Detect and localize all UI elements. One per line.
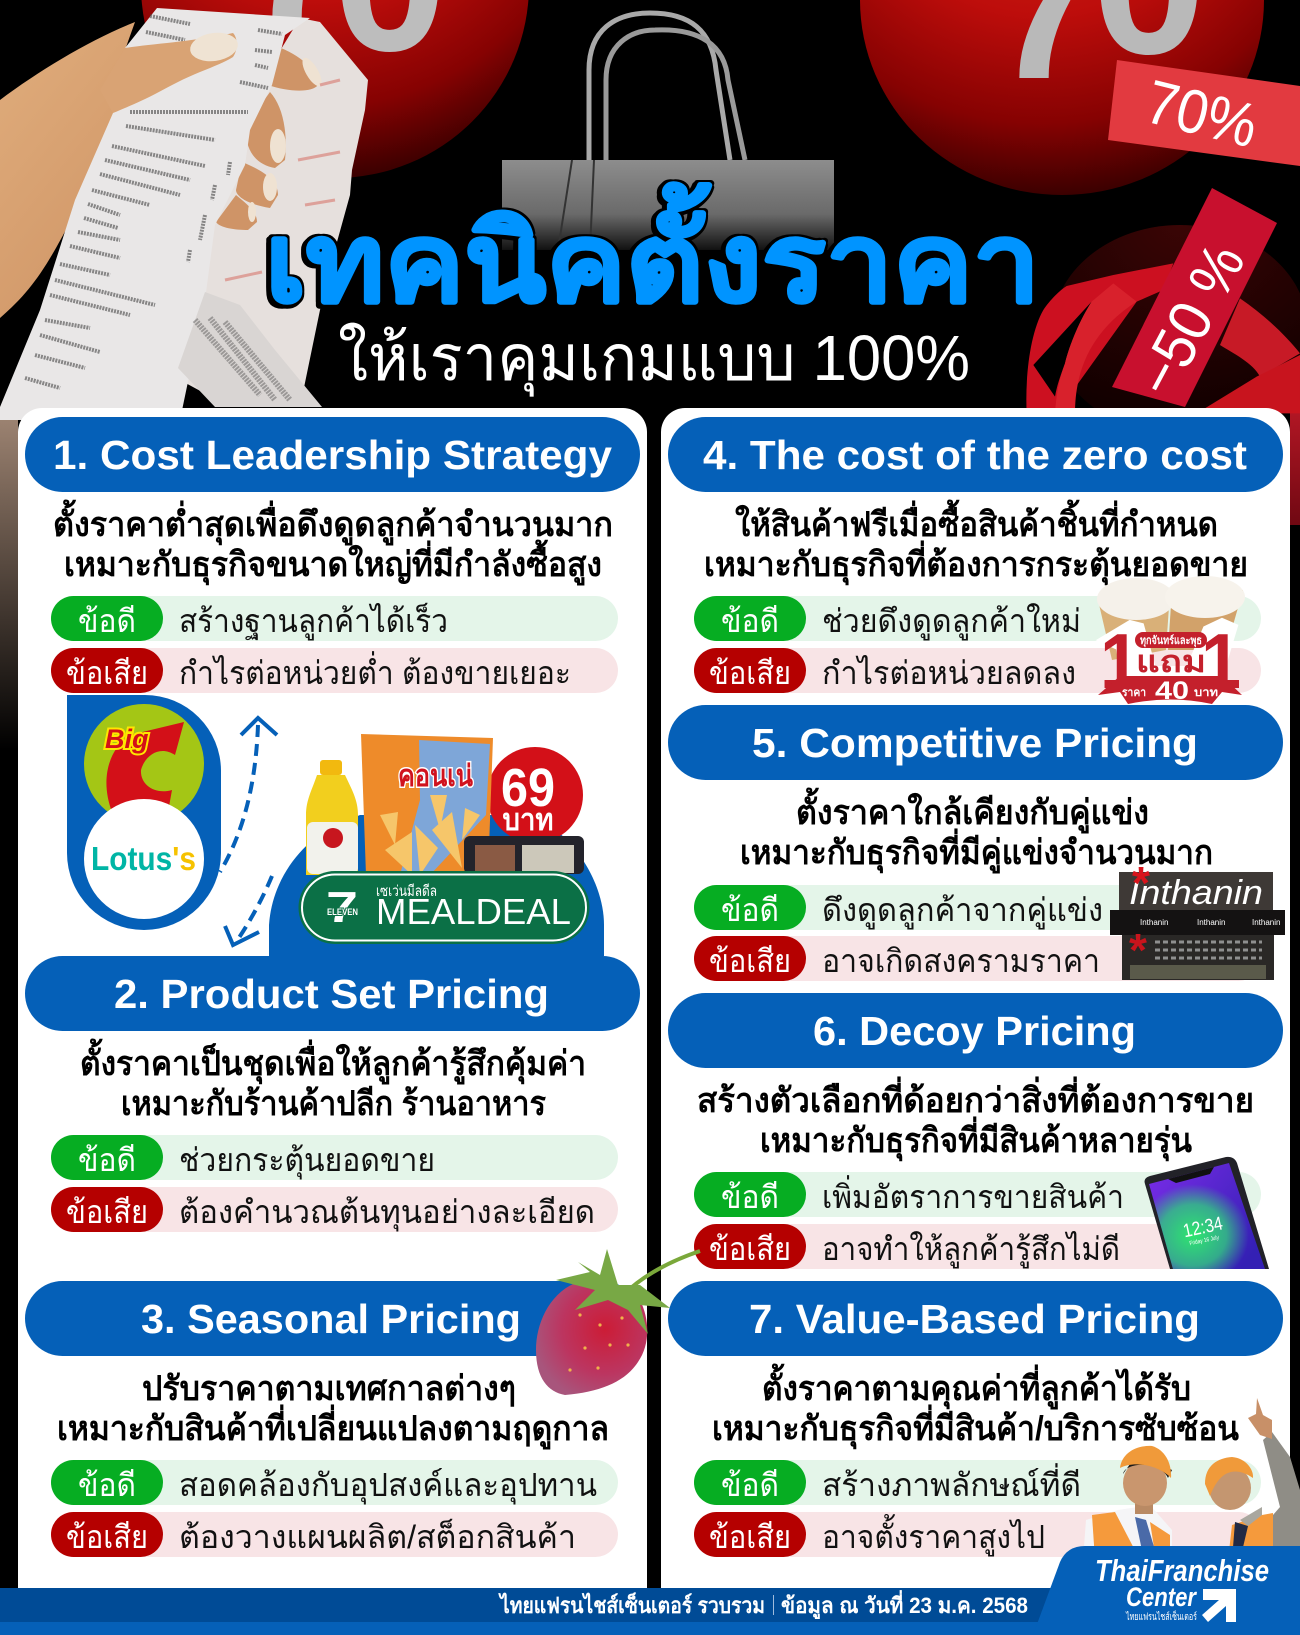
- heading 3: 3. Seasonal Pricing: [141, 1296, 521, 1342]
- panel: right white card: [661, 408, 1290, 1590]
- pro row 7: ข้อดี: [721, 1467, 779, 1503]
- con row 2: ข้อเสีย: [66, 1194, 148, 1230]
- pro row 3: สอดคล้องกับอุปสงค์และอุปทาน: [179, 1467, 597, 1505]
- pro row 2: ช่วยกระตุ้นยอดขาย: [179, 1142, 435, 1180]
- pro row 5: ข้อดี: [721, 892, 779, 928]
- description 1: [53, 499, 613, 586]
- pro row 4: ข้อดี: [721, 603, 779, 639]
- receipt lower strip: [178, 292, 322, 407]
- con row 3: ข้อเสีย: [66, 1519, 148, 1555]
- illustration: Inthanin storefront: Inthanin: [1197, 918, 1225, 927]
- description 7: ตั้งราคาตามคุณค่าที่ลูกค้าได้รับ: [762, 1363, 1191, 1410]
- logo: ThaiFranchise Center: ไทยแฟรนไชส์เซ็นเตอร์: [1125, 1609, 1197, 1623]
- section 4: [668, 417, 1283, 693]
- con row 5: ข้อเสีย: [709, 943, 791, 979]
- section 5: [668, 705, 1283, 981]
- pro row 1: สร้างฐานลูกค้าได้เร็ว: [179, 602, 448, 641]
- description 7: [712, 1363, 1239, 1450]
- con row 1: [51, 648, 618, 693]
- con row 4: กำไรต่อหน่วยลดลง: [822, 655, 1076, 691]
- pro row 4: ช่วยดึงดูดลูกค้าใหม่: [822, 603, 1081, 641]
- illustration: strawberry: [536, 1249, 700, 1395]
- description 5: เหมาะกับธุรกิจที่มีคู่แข่งจำนวนมาก: [740, 828, 1213, 874]
- con row 1: ข้อเสีย: [66, 655, 148, 691]
- section 6: [668, 993, 1283, 1269]
- section 1: [25, 417, 640, 693]
- balloon dark: [1062, 225, 1300, 408]
- footer credit: ไทยแฟรนไชส์เซ็นเตอร์ รวบรวม: [498, 1591, 765, 1618]
- description 4: ให้สินค้าฟรีเมื่อซื้อสินค้าชิ้นที่กำหนด: [735, 499, 1218, 544]
- description 4: [704, 499, 1248, 586]
- description 1: ตั้งราคาต่ำสุดเพื่อดึงดูดลูกค้าจำนวนมาก: [53, 499, 613, 546]
- illustration: Inthanin storefront: Inthanin: [1129, 874, 1263, 912]
- description 1: เหมาะกับธุรกิจขนาดใหญ่ที่มีกำลังซื้อสูง: [64, 539, 602, 586]
- footer date: ข้อมูล ณ วันที่ 23 ม.ค. 2568: [781, 1589, 1028, 1620]
- logo: Lotus's: Lotus's: [91, 840, 196, 877]
- description 2: ตั้งราคาเป็นชุดเพื่อให้ลูกค้ารู้สึกคุ้มค่า: [80, 1038, 586, 1085]
- title: เทคนิคตั้งราคา: [265, 182, 1040, 325]
- berry seeds: [568, 1313, 630, 1372]
- pro row 7: [694, 1460, 1261, 1505]
- con row 2: ต้องคำนวณต้นทุนอย่างละเอียด: [179, 1194, 595, 1232]
- description 3: [57, 1370, 609, 1450]
- ribbon: [1026, 263, 1300, 413]
- description 6: เหมาะกับธุรกิจที่มีสินค้าหลายรุ่น: [760, 1116, 1192, 1162]
- con row 7: [694, 1512, 1261, 1557]
- heading 3: [25, 1281, 640, 1356]
- promo badge: [1098, 617, 1242, 705]
- con row 4: [694, 648, 1261, 693]
- berry body: [536, 1281, 647, 1395]
- description 4: เหมาะกับธุรกิจที่ต้องการกระตุ้นยอดขาย: [704, 540, 1248, 586]
- pro row 2: [51, 1135, 618, 1180]
- illustration: smartphone: Friday 16 July: [1189, 1235, 1220, 1247]
- logo backing: [67, 695, 221, 930]
- promo badge: 1: [1100, 617, 1140, 705]
- description 7: เหมาะกับธุรกิจที่มีสินค้า/บริการซับซ้อน: [712, 1404, 1239, 1450]
- price tag 70%: 70%: [1139, 67, 1264, 161]
- price circle: บาท: [502, 804, 554, 837]
- con row 5: [694, 936, 1261, 981]
- heading 4: [668, 417, 1283, 492]
- illustration: coffee buy one get one: [1097, 576, 1245, 705]
- thumb: [100, 33, 237, 113]
- thumb nail: [190, 32, 238, 62]
- heading 6: [668, 993, 1283, 1068]
- section 7: [668, 1281, 1283, 1557]
- description 3: เหมาะกับสินค้าที่เปลี่ยนแปลงตามฤดูกาล: [57, 1404, 609, 1450]
- illustration: 7-Eleven meal deal: [269, 734, 604, 956]
- logo: ThaiFranchise Center: ThaiFranchise: [1095, 1553, 1269, 1588]
- promo badge: ทุกจันทร์และพุธ: [1140, 634, 1202, 648]
- pro row 6: ข้อดี: [721, 1179, 779, 1215]
- con row 3: [51, 1512, 618, 1557]
- illustration: Inthanin storefront: *: [1129, 924, 1147, 976]
- logo: ThaiFranchise Center: Center: [1126, 1582, 1197, 1612]
- heading 1: [25, 417, 640, 492]
- promo badge: ราคา: [1122, 687, 1146, 699]
- heading 7: [668, 1281, 1283, 1356]
- pro row 7: สร้างภาพลักษณ์ที่ดี: [822, 1463, 1081, 1503]
- description 6: สร้างตัวเลือกที่ด้อยกว่าสิ่งที่ต้องการขาย: [697, 1076, 1254, 1120]
- receipt print red: [225, 80, 340, 280]
- price tag -50%: −50 %: [1123, 233, 1258, 407]
- engineer left: [1083, 1446, 1172, 1560]
- hero photo: balloons, bag, tags: [141, 0, 1300, 435]
- left gutter glow: [0, 410, 18, 750]
- engineer right: [1205, 1398, 1300, 1560]
- meal deal badge: เซเว่นมีลดีล: [376, 883, 437, 900]
- illustration: Inthanin storefront: Inthanin: [1140, 918, 1168, 927]
- description 3: ปรับราคาตามเทศกาลต่างๆ: [142, 1370, 516, 1408]
- icon: arrow: [1202, 1589, 1236, 1622]
- price circle: 69: [501, 758, 555, 818]
- illustration: Inthanin storefront: Inthanin: [1252, 918, 1280, 927]
- balloon left: [141, 0, 529, 178]
- logo: Big C: [84, 704, 204, 824]
- pro row 3: ข้อดี: [78, 1467, 136, 1503]
- food tray: [464, 836, 584, 874]
- heading 2: [25, 956, 640, 1031]
- heading 5: 5. Competitive Pricing: [752, 720, 1198, 766]
- coffee cups: [1097, 576, 1245, 660]
- price tag 70%: [1108, 60, 1300, 166]
- snack bag: [361, 734, 493, 875]
- pro row 6: [694, 1172, 1261, 1217]
- con row 6: [694, 1224, 1261, 1269]
- illustration: smartphone: [1145, 1157, 1269, 1269]
- description 6: [697, 1076, 1254, 1162]
- promo badge: 40: [1155, 677, 1189, 705]
- con row 5: อาจเกิดสงครามราคา: [822, 943, 1100, 979]
- right gutter ribbon: [1290, 400, 1300, 525]
- con row 4: ข้อเสีย: [709, 655, 791, 691]
- stem: [622, 1251, 700, 1296]
- meal deal badge: ELEVEN: [327, 907, 358, 917]
- receipt front strip: [0, 8, 310, 420]
- illustration: Inthanin storefront: [1110, 857, 1285, 980]
- heading 6: 6. Decoy Pricing: [813, 1008, 1136, 1054]
- meal deal badge: [298, 871, 590, 944]
- receipt print: [25, 16, 290, 400]
- subtitle: ให้เราคุมเกมแบบ 100%: [338, 322, 970, 397]
- con row 3: ต้องวางแผนผลิต/สต็อกสินค้า: [179, 1518, 576, 1555]
- panel: left white card: [18, 408, 647, 1590]
- logo: Big C: Big: [105, 724, 149, 754]
- palm: [0, 22, 135, 318]
- con row 1: กำไรต่อหน่วยต่ำ ต้องขายเยอะ: [179, 651, 571, 691]
- pro row 4: [694, 596, 1261, 641]
- drink bottle: [306, 760, 358, 875]
- description 2: [80, 1038, 586, 1123]
- pro row 1: ข้อดี: [78, 603, 136, 639]
- pro row 3: [51, 1460, 618, 1505]
- description 5: [740, 787, 1213, 874]
- meal deal badge: 7: [326, 883, 358, 932]
- hand holding receipt: [0, 8, 368, 420]
- balloon right: [860, 0, 1264, 195]
- heading 1: 1. Cost Leadership Strategy: [53, 432, 612, 478]
- meal deal backing: [269, 815, 604, 956]
- description 5: ตั้งราคาใกล้เคียงกับคู่แข่ง: [796, 787, 1149, 834]
- promo badge: 1: [1201, 617, 1241, 705]
- pro row 1: [51, 596, 618, 641]
- con row 2: [51, 1187, 618, 1232]
- pro row 2: ข้อดี: [78, 1142, 136, 1178]
- con row 6: อาจทำให้ลูกค้ารู้สึกไม่ดี: [822, 1231, 1120, 1269]
- footer bar: [0, 1588, 1300, 1635]
- fingers: [216, 46, 318, 230]
- section 3: [25, 1281, 640, 1557]
- section 2: [25, 956, 640, 1232]
- heading 4: 4. The cost of the zero cost: [703, 432, 1247, 478]
- pro row 5: [694, 885, 1261, 930]
- con row 7: อาจตั้งราคาสูงไป: [822, 1514, 1045, 1557]
- promo badge: บาท: [1194, 687, 1218, 699]
- illustration: Inthanin storefront: *: [1132, 857, 1150, 909]
- finger nails: [248, 55, 325, 222]
- heading 7: 7. Value-Based Pricing: [749, 1296, 1200, 1342]
- promo badge: แถม: [1136, 646, 1206, 679]
- description 2: เหมาะกับร้านค้าปลีก ร้านอาหาร: [121, 1085, 547, 1123]
- logo: Lotus's: [84, 799, 204, 919]
- illustration: smartphone: 12:34: [1181, 1213, 1225, 1242]
- pro row 6: เพิ่มอัตราการขายสินค้า: [822, 1175, 1124, 1215]
- con row 6: ข้อเสีย: [709, 1231, 791, 1267]
- pro row 5: ดึงดูดลูกค้าจากคู่แข่ง: [822, 892, 1103, 930]
- con row 7: ข้อเสีย: [709, 1519, 791, 1555]
- price circle: [487, 747, 583, 843]
- shopping bag: [502, 13, 834, 250]
- heading 2: 2. Product Set Pricing: [114, 971, 549, 1017]
- receipt back strip: [180, 18, 368, 407]
- arrow: up and down dashed: [220, 718, 277, 945]
- heading 5: [668, 705, 1283, 780]
- illustration: two engineers: [1083, 1398, 1300, 1560]
- leaves: [556, 1249, 670, 1334]
- snack bag: คอนเน่: [398, 760, 473, 793]
- meal deal badge: MEALDEAL: [376, 891, 571, 932]
- logo: ThaiFranchise Center: [1033, 1546, 1300, 1635]
- illustration: retailer logos: [67, 695, 221, 930]
